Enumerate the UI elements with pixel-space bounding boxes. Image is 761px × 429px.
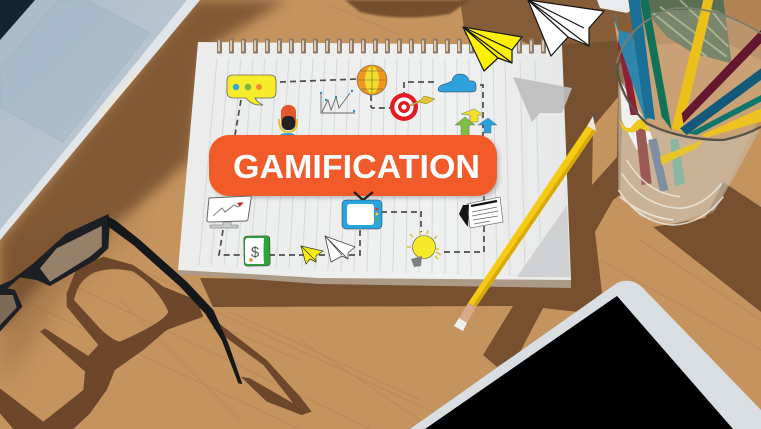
glass body <box>618 10 761 225</box>
icon: computer monitor <box>207 196 251 228</box>
pencil on notebook <box>454 113 596 331</box>
icon: line chart <box>320 90 355 113</box>
icon: television <box>342 192 382 229</box>
temple arm <box>107 216 242 384</box>
laptop notch <box>97 68 140 118</box>
notebook <box>178 42 572 288</box>
laptop trackpad <box>0 0 150 142</box>
icon: globe <box>357 65 387 95</box>
pencil: blue right <box>680 68 761 135</box>
plant leaf <box>647 0 732 63</box>
white device edge <box>597 0 647 13</box>
pencil: blue <box>628 0 655 120</box>
banner <box>209 135 499 198</box>
ruled page lines <box>199 58 541 276</box>
icon: small white paper plane <box>325 236 355 262</box>
icon: light bulb <box>407 230 441 267</box>
icon: target with arrow <box>390 93 435 121</box>
icon: growth arrows <box>455 109 497 136</box>
pencil: maroon right <box>682 30 761 123</box>
icon: microphone <box>279 105 297 136</box>
glass rim <box>617 63 761 140</box>
glass with coloured pencils <box>614 0 761 225</box>
banner title: GAMIFICATION <box>233 148 480 185</box>
laptop <box>0 0 200 240</box>
icon: newspaper <box>459 197 503 228</box>
temple arm shadow <box>213 322 312 415</box>
pencil: green <box>640 0 672 130</box>
left lens frame <box>0 287 22 332</box>
glass base rings <box>618 160 723 225</box>
icon: speech bubble <box>227 75 276 105</box>
page shadow from pencil <box>517 205 570 277</box>
large yellow paper plane <box>463 27 522 71</box>
icon: cloud <box>438 74 476 92</box>
eyeglasses <box>0 214 242 384</box>
right lens frame <box>0 214 110 295</box>
icon: small yellow paper plane <box>301 246 323 264</box>
pencil: green right <box>688 95 761 135</box>
pencil: yellow <box>672 0 713 132</box>
glasses shadow <box>0 257 312 429</box>
large white paper plane <box>528 0 604 56</box>
pencil: back blue <box>615 10 653 120</box>
icon: money card: $ <box>251 244 260 261</box>
dashed connector paths <box>219 79 484 255</box>
pencil: yellow right <box>702 108 761 137</box>
pencil: maroon <box>618 33 639 115</box>
spiral binding <box>217 38 546 54</box>
tablet <box>410 281 761 429</box>
laptop keyboard <box>0 0 35 40</box>
glass label reflection <box>620 80 653 150</box>
refracted pencils <box>619 119 703 192</box>
icon: money card <box>244 236 270 266</box>
